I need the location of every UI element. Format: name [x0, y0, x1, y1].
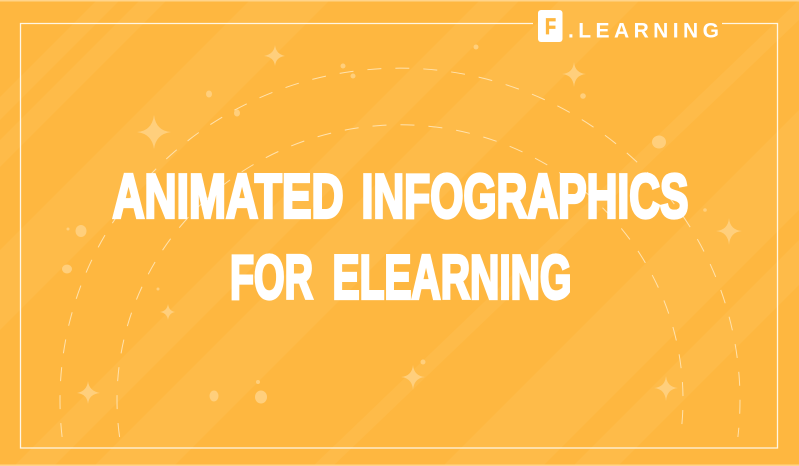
sparkle — [654, 376, 678, 401]
sparkle — [137, 115, 171, 149]
title line 2 first word: FOR — [230, 244, 313, 312]
sparkle — [77, 381, 100, 404]
outer arc — [60, 68, 740, 437]
sparkle — [401, 365, 425, 390]
logo letter F: F — [545, 14, 556, 39]
sparkle — [264, 45, 285, 66]
inner arc — [117, 125, 683, 437]
title line 2 second word: ELEARNING — [332, 244, 572, 312]
logo badge — [538, 10, 562, 42]
title — [112, 162, 688, 312]
dots — [62, 44, 707, 404]
logo — [538, 10, 719, 42]
sparkle — [160, 304, 175, 320]
logo wordmark: .LEARNING — [568, 20, 719, 42]
sparkles — [77, 45, 742, 404]
dashed arcs — [60, 68, 740, 437]
title line 1 first word: ANIMATED — [112, 162, 344, 232]
sparkle — [562, 62, 586, 87]
sparkle — [716, 218, 742, 245]
